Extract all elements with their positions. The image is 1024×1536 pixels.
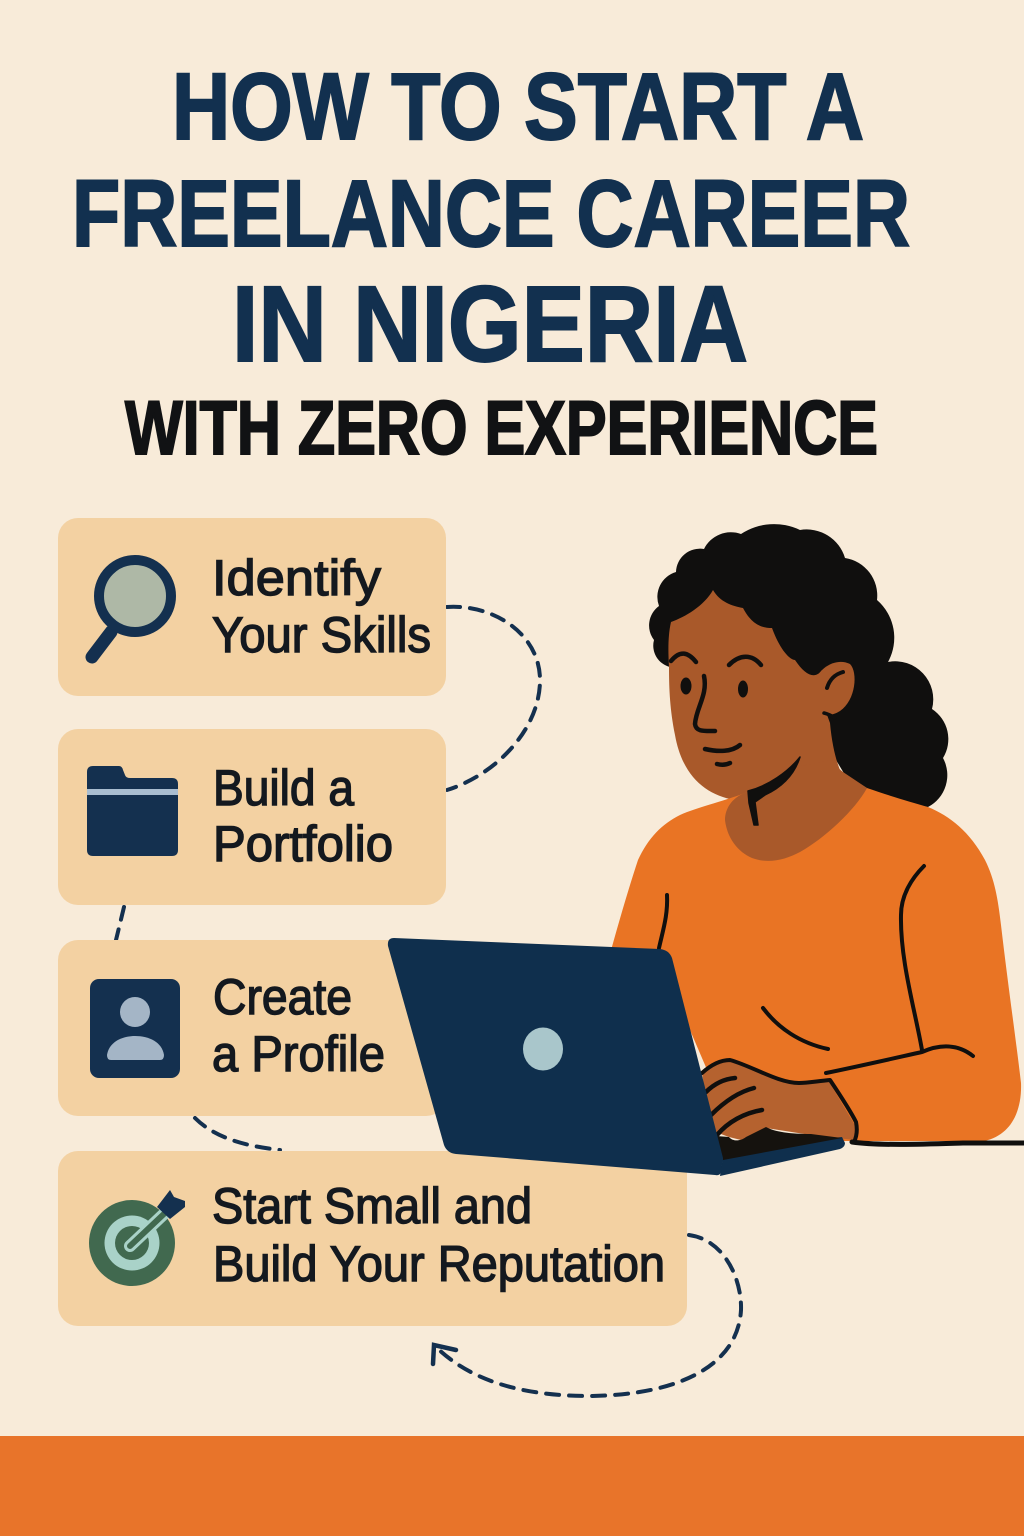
label: a Profile: [212, 1026, 385, 1082]
laptop screen: [388, 938, 723, 1175]
keyboard: [716, 1127, 842, 1160]
neckline shadow: [725, 760, 867, 861]
label: Portfolio: [213, 816, 393, 872]
hand: [702, 1060, 857, 1142]
icon: target with arrow: [89, 1190, 185, 1286]
icon: folder: [87, 766, 178, 856]
label: Your Skills: [212, 607, 431, 663]
label: Start Small and: [212, 1178, 532, 1234]
illustration: woman at laptop: [388, 524, 1024, 1176]
dashed connector: card 3 to card 4: [195, 1118, 280, 1150]
label: Create: [213, 969, 352, 1025]
laptop base: [720, 1137, 845, 1176]
panel: build a portfolio: [58, 729, 446, 905]
label: Identify: [212, 550, 381, 606]
panel: start small and build your reputation: [58, 1151, 687, 1326]
neck and face skin: [668, 590, 867, 860]
icon: profile: [90, 979, 180, 1078]
panel: create a profile: [58, 940, 446, 1116]
sweater: [606, 788, 1021, 1141]
hair: [649, 524, 948, 807]
title: [72, 54, 910, 471]
table line: [852, 1142, 1024, 1144]
laptop: [388, 938, 845, 1176]
icon: magnifying glass: [92, 560, 171, 657]
face features: [671, 654, 843, 765]
jaw shadow: [748, 757, 800, 825]
label: Build a: [213, 760, 354, 816]
laptop logo: [523, 1028, 563, 1070]
title line 3: IN NIGERIA: [232, 263, 748, 384]
dashed connector: card 2 to card 3: [116, 907, 124, 940]
label: Build Your Reputation: [213, 1236, 665, 1292]
dashed arrow: loop back: [433, 1235, 741, 1396]
dashed connector: card 1 to card 2: [447, 607, 540, 790]
ear: [815, 662, 855, 715]
sweater lines: [659, 866, 973, 1073]
title line 1: HOW TO START A: [172, 54, 864, 160]
footer bar: [0, 1436, 1024, 1536]
panel: identify your skills: [58, 518, 446, 696]
